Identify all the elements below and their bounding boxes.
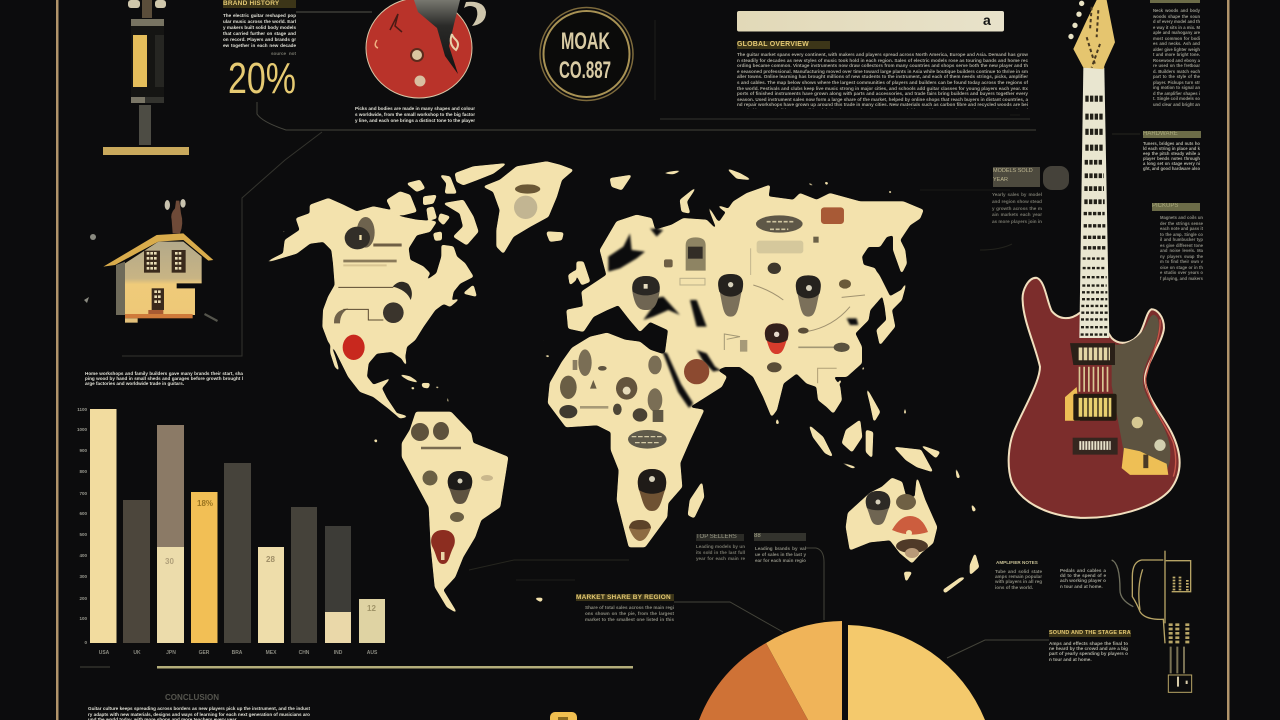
badge: round seal bbox=[540, 8, 633, 100]
pie right slice bbox=[848, 625, 985, 720]
guitar tuning pegs bbox=[1068, 1, 1084, 39]
pie lower left slice bbox=[699, 643, 808, 720]
Red Sea cut bbox=[663, 353, 693, 408]
heading: overview bbox=[737, 41, 830, 49]
y axis labels: 100 bbox=[79, 616, 87, 621]
value labels on bars: 18% bbox=[197, 499, 213, 508]
Greenland bbox=[483, 162, 573, 253]
legend chip: pie callout top: 88 bbox=[754, 533, 761, 539]
house front wall bbox=[125, 242, 202, 315]
badge: round seal: MOAK bbox=[561, 28, 610, 55]
y axis labels: 700 bbox=[79, 491, 87, 496]
guitar frets bbox=[1081, 99, 1109, 335]
y axis labels: 1100 bbox=[77, 407, 87, 412]
y axis labels: 600 bbox=[79, 511, 87, 516]
Arctic and Pacific islands bbox=[547, 168, 907, 386]
y axis labels: 0 bbox=[84, 640, 87, 645]
house side wall bbox=[116, 262, 125, 315]
heading: pie callout top: TOP SELLERS bbox=[696, 534, 737, 540]
big number: 20%: 20% bbox=[228, 54, 296, 103]
heading: pie callout right: SOUND AND THE STAGE ERA bbox=[1049, 630, 1131, 636]
value labels on bars: 30 bbox=[165, 557, 174, 566]
guitar neck bbox=[1079, 68, 1109, 338]
y axis labels: 500 bbox=[79, 532, 87, 537]
icon: house bbox=[103, 199, 213, 323]
guitar pickups and strings bbox=[1070, 343, 1166, 468]
landmass: South America bbox=[402, 412, 508, 613]
heading: brand history bbox=[223, 0, 296, 8]
x axis labels: UK bbox=[133, 650, 141, 656]
guitar yellow plates bbox=[1065, 387, 1168, 475]
world map bbox=[263, 162, 979, 613]
Arctic islands bbox=[283, 163, 563, 443]
bars bbox=[90, 409, 385, 643]
heading: right column middle bbox=[1143, 131, 1201, 138]
heading: right column middle: HARDWARE bbox=[1143, 131, 1178, 137]
icon: yellow tag bottom centre bbox=[550, 712, 577, 720]
x axis labels bbox=[99, 650, 378, 656]
x axis labels: JPN bbox=[166, 650, 176, 656]
connector lines bbox=[122, 12, 1140, 658]
icon: electric guitar bbox=[1009, 0, 1180, 518]
house base bbox=[125, 310, 193, 323]
bar chart bbox=[77, 407, 385, 656]
seas cut into Eurasia bbox=[608, 228, 858, 372]
y axis labels: 900 bbox=[79, 448, 87, 453]
callout heading bars: MODELS SOLD YEAR bbox=[993, 168, 1033, 183]
map markers: Eurasia bbox=[559, 207, 865, 449]
landmasses bbox=[263, 162, 979, 613]
callout: guitar left block bbox=[992, 166, 1069, 226]
Eurasia outline bbox=[567, 185, 923, 417]
legend chip: pie callout top bbox=[754, 533, 806, 541]
map markers: South America bbox=[411, 422, 493, 564]
text: lower right note left: Tube and solid state amps remain popular with players in all regions of the world. bbox=[995, 569, 1042, 590]
guitar headstock bbox=[1073, 0, 1115, 69]
heading: bottom left note: CONCLUSION bbox=[165, 693, 219, 702]
heading: right column lower bbox=[1152, 203, 1200, 211]
map markers: North America bbox=[334, 184, 540, 360]
y axis labels: 1000 bbox=[77, 427, 87, 432]
heading: brand history: BRAND HISTORY bbox=[223, 0, 279, 7]
house windows bbox=[144, 250, 186, 310]
banner bar top right: a bbox=[983, 12, 991, 28]
North America bbox=[263, 198, 473, 418]
icon: red guitar pick disc bbox=[366, 0, 486, 98]
landmass: Eurasia bbox=[547, 168, 923, 417]
icon: lamp column top left bbox=[103, 0, 189, 155]
callout grey blob bbox=[1043, 166, 1069, 190]
divider under chart bbox=[80, 666, 633, 668]
heading: overview: GLOBAL OVERVIEW bbox=[737, 41, 809, 48]
banner bar top right bbox=[737, 11, 1004, 32]
heading: right column lower: PICKUPS bbox=[1152, 203, 1178, 209]
house roof bbox=[103, 233, 213, 267]
house chimney figure bbox=[165, 199, 186, 233]
text: pie callout right: Amps and effects shape the final tone heard by the crowd and are a big part of yearly spending by players on tour and at home. bbox=[1049, 641, 1128, 662]
icon: gold outline equipment bbox=[1112, 551, 1192, 692]
x axis labels: USA bbox=[99, 650, 110, 656]
y axis labels: 800 bbox=[79, 469, 87, 474]
y axis labels: 200 bbox=[79, 596, 87, 601]
heading: right column top bbox=[1150, 0, 1200, 3]
x axis labels: BRA bbox=[232, 650, 243, 656]
value labels on bars: 12 bbox=[367, 604, 376, 613]
text: under house: Home workshops and family builders gave many brands their start, shaping wood by hand in small sheds and garages before growth brought large factories and worldwide trade in guitars. bbox=[85, 371, 243, 386]
badge: round seal: CO.887 bbox=[559, 57, 611, 84]
heading: lower right note: AMPLIFIER NOTES bbox=[996, 560, 1038, 565]
guitar body bbox=[1009, 278, 1180, 518]
x axis labels: GER bbox=[199, 650, 210, 656]
heading: pie callout left: MARKET SHARE BY REGION bbox=[576, 594, 671, 601]
x axis labels: IND bbox=[334, 650, 343, 656]
text: lower right note right: Pedals and cables add to the spend of each working player on tour and at home. bbox=[1060, 568, 1106, 589]
x axis labels: AUS bbox=[367, 650, 378, 656]
y axis labels: 400 bbox=[79, 553, 87, 558]
landmass: North America and Arctic bbox=[263, 162, 573, 443]
small specks beside house bbox=[84, 234, 218, 322]
guitar pickguard bbox=[1112, 315, 1170, 473]
value labels on bars: 28 bbox=[266, 555, 275, 564]
map markers: Africa south bbox=[629, 469, 666, 541]
x axis labels: MEX bbox=[266, 650, 277, 656]
landmass: Australia and Oceania bbox=[534, 387, 979, 602]
y axis labels bbox=[77, 407, 87, 645]
x axis labels: CHN bbox=[299, 650, 310, 656]
landmass: Africa bbox=[548, 333, 704, 547]
pie upper left slice bbox=[766, 621, 842, 720]
value labels on bars bbox=[165, 499, 376, 613]
y axis labels: 300 bbox=[79, 574, 87, 579]
callout heading bars bbox=[993, 167, 1040, 187]
pie chart bbox=[699, 621, 985, 720]
map markers: Australia bbox=[866, 491, 928, 558]
